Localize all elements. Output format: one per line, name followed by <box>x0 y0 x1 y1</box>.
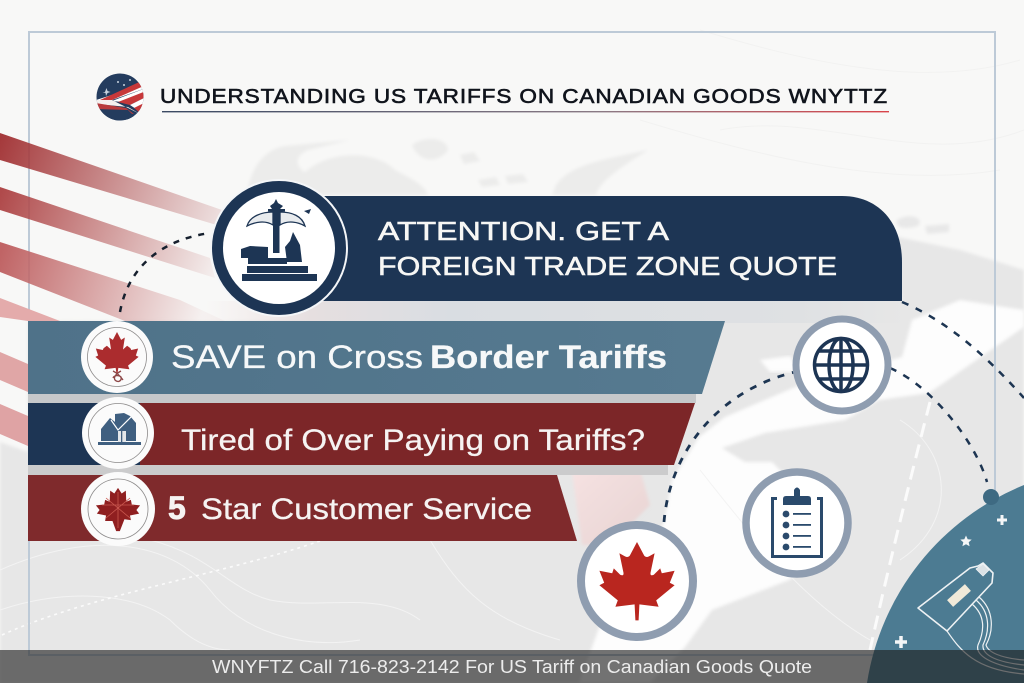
attention banner text: FOREIGN TRADE ZONE QUOTE <box>378 251 837 281</box>
tube label <box>947 584 971 607</box>
sparkle star <box>960 536 972 546</box>
icon: tube outline <box>918 563 1024 674</box>
contour lines <box>0 420 941 650</box>
sparkle plus bottom <box>895 636 907 648</box>
icon: US flag globe logo <box>96 73 146 122</box>
dashed route: globe to teal circle <box>890 368 987 482</box>
icon: pedestal monument badge <box>210 179 348 317</box>
icon: red leaf badge <box>81 472 155 546</box>
title group <box>96 73 889 122</box>
divider strip <box>28 394 696 403</box>
panel: five star row <box>28 475 577 541</box>
five star row text: 5 <box>168 490 186 526</box>
tired row text: Tired of Over Paying on Tariffs? <box>181 424 645 457</box>
pin dot <box>983 489 999 505</box>
white land band <box>572 300 1024 683</box>
divider strip <box>28 465 668 475</box>
panel: tired of over paying row <box>28 403 695 465</box>
footer text: WNYFTZ Call 716-823-2142 For US Tariff on Canadian Goods Quote <box>212 657 812 677</box>
icon: globe badge <box>796 319 888 411</box>
dotted trail <box>2 541 320 635</box>
heading: UNDERSTANDING US TARIFFS ON CANADIAN GOODS WNYTTZ <box>160 85 888 108</box>
icon: clipboard badge <box>746 472 848 574</box>
icon: Canadian maple leaf badge <box>581 525 693 637</box>
footer bar <box>0 650 1024 683</box>
world map background <box>0 139 1024 683</box>
panel: attention banner <box>320 196 902 301</box>
sparkle plus top <box>997 515 1007 525</box>
dashed route: header to first row <box>120 233 210 312</box>
dashed route: banner to far right <box>902 302 1024 398</box>
panel: teal corner with tube icon <box>867 485 1024 683</box>
five star row text: Star Customer Service <box>201 493 532 526</box>
title underline <box>162 111 889 112</box>
red diagonal stripes <box>0 133 240 446</box>
save row text: Border Tariffs <box>430 339 667 375</box>
white dashed route <box>870 402 930 650</box>
attention banner text: ATTENTION. GET A <box>378 216 670 246</box>
attention banner text <box>378 216 837 281</box>
icon: house badge <box>82 397 154 469</box>
save row text: SAVE on Cross <box>171 339 423 375</box>
icon: maple leaf badge <box>81 321 153 393</box>
dashed route: maple leaf to globe <box>664 372 795 522</box>
panel: save row <box>28 321 725 394</box>
band beneath attention banner <box>205 301 905 323</box>
